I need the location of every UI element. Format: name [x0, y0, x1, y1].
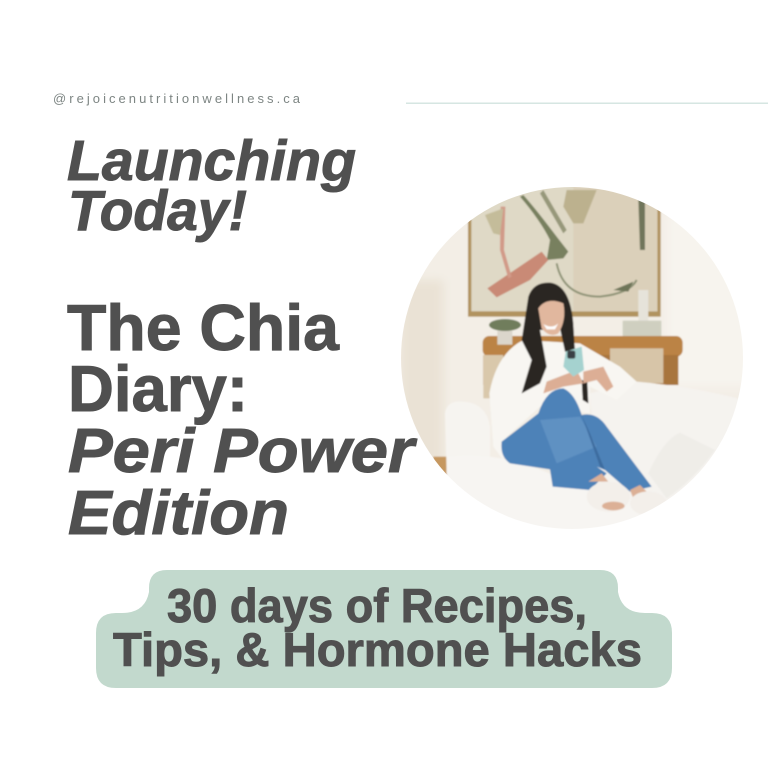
heading: the chia diary peri power edition [67, 291, 417, 548]
sofa [445, 401, 490, 473]
plant [497, 331, 512, 345]
callout pill: Tips, & Hormone Hacks [113, 623, 642, 676]
heading: launching today: Launching [67, 129, 356, 193]
sideboard [483, 336, 683, 357]
heading: the chia diary peri power edition: Diary: [68, 352, 248, 425]
slippers [588, 473, 608, 482]
callout pill [96, 570, 672, 688]
floor [432, 456, 448, 475]
glass vase and glasses [637, 290, 650, 320]
circular photo: woman on sofa with phone [400, 180, 750, 530]
hands [543, 370, 583, 393]
phone [563, 347, 584, 377]
infographic canvas [54, 94, 768, 688]
face [538, 301, 564, 335]
website handle: @rejoicenutritionwellness.ca [53, 91, 301, 106]
heading: launching today [67, 129, 356, 243]
sweater [489, 340, 637, 460]
painting [467, 210, 662, 318]
wall [401, 212, 740, 474]
heading: the chia diary peri power edition: Peri Power [68, 417, 417, 486]
hair [522, 283, 575, 393]
heading: launching today: Today! [68, 179, 247, 243]
heading: the chia diary peri power edition: Edition [68, 479, 289, 548]
heading: the chia diary peri power edition: The Chia [67, 291, 340, 364]
callout pill: 30 days of Recipes, [167, 579, 587, 632]
jeans [501, 388, 652, 492]
